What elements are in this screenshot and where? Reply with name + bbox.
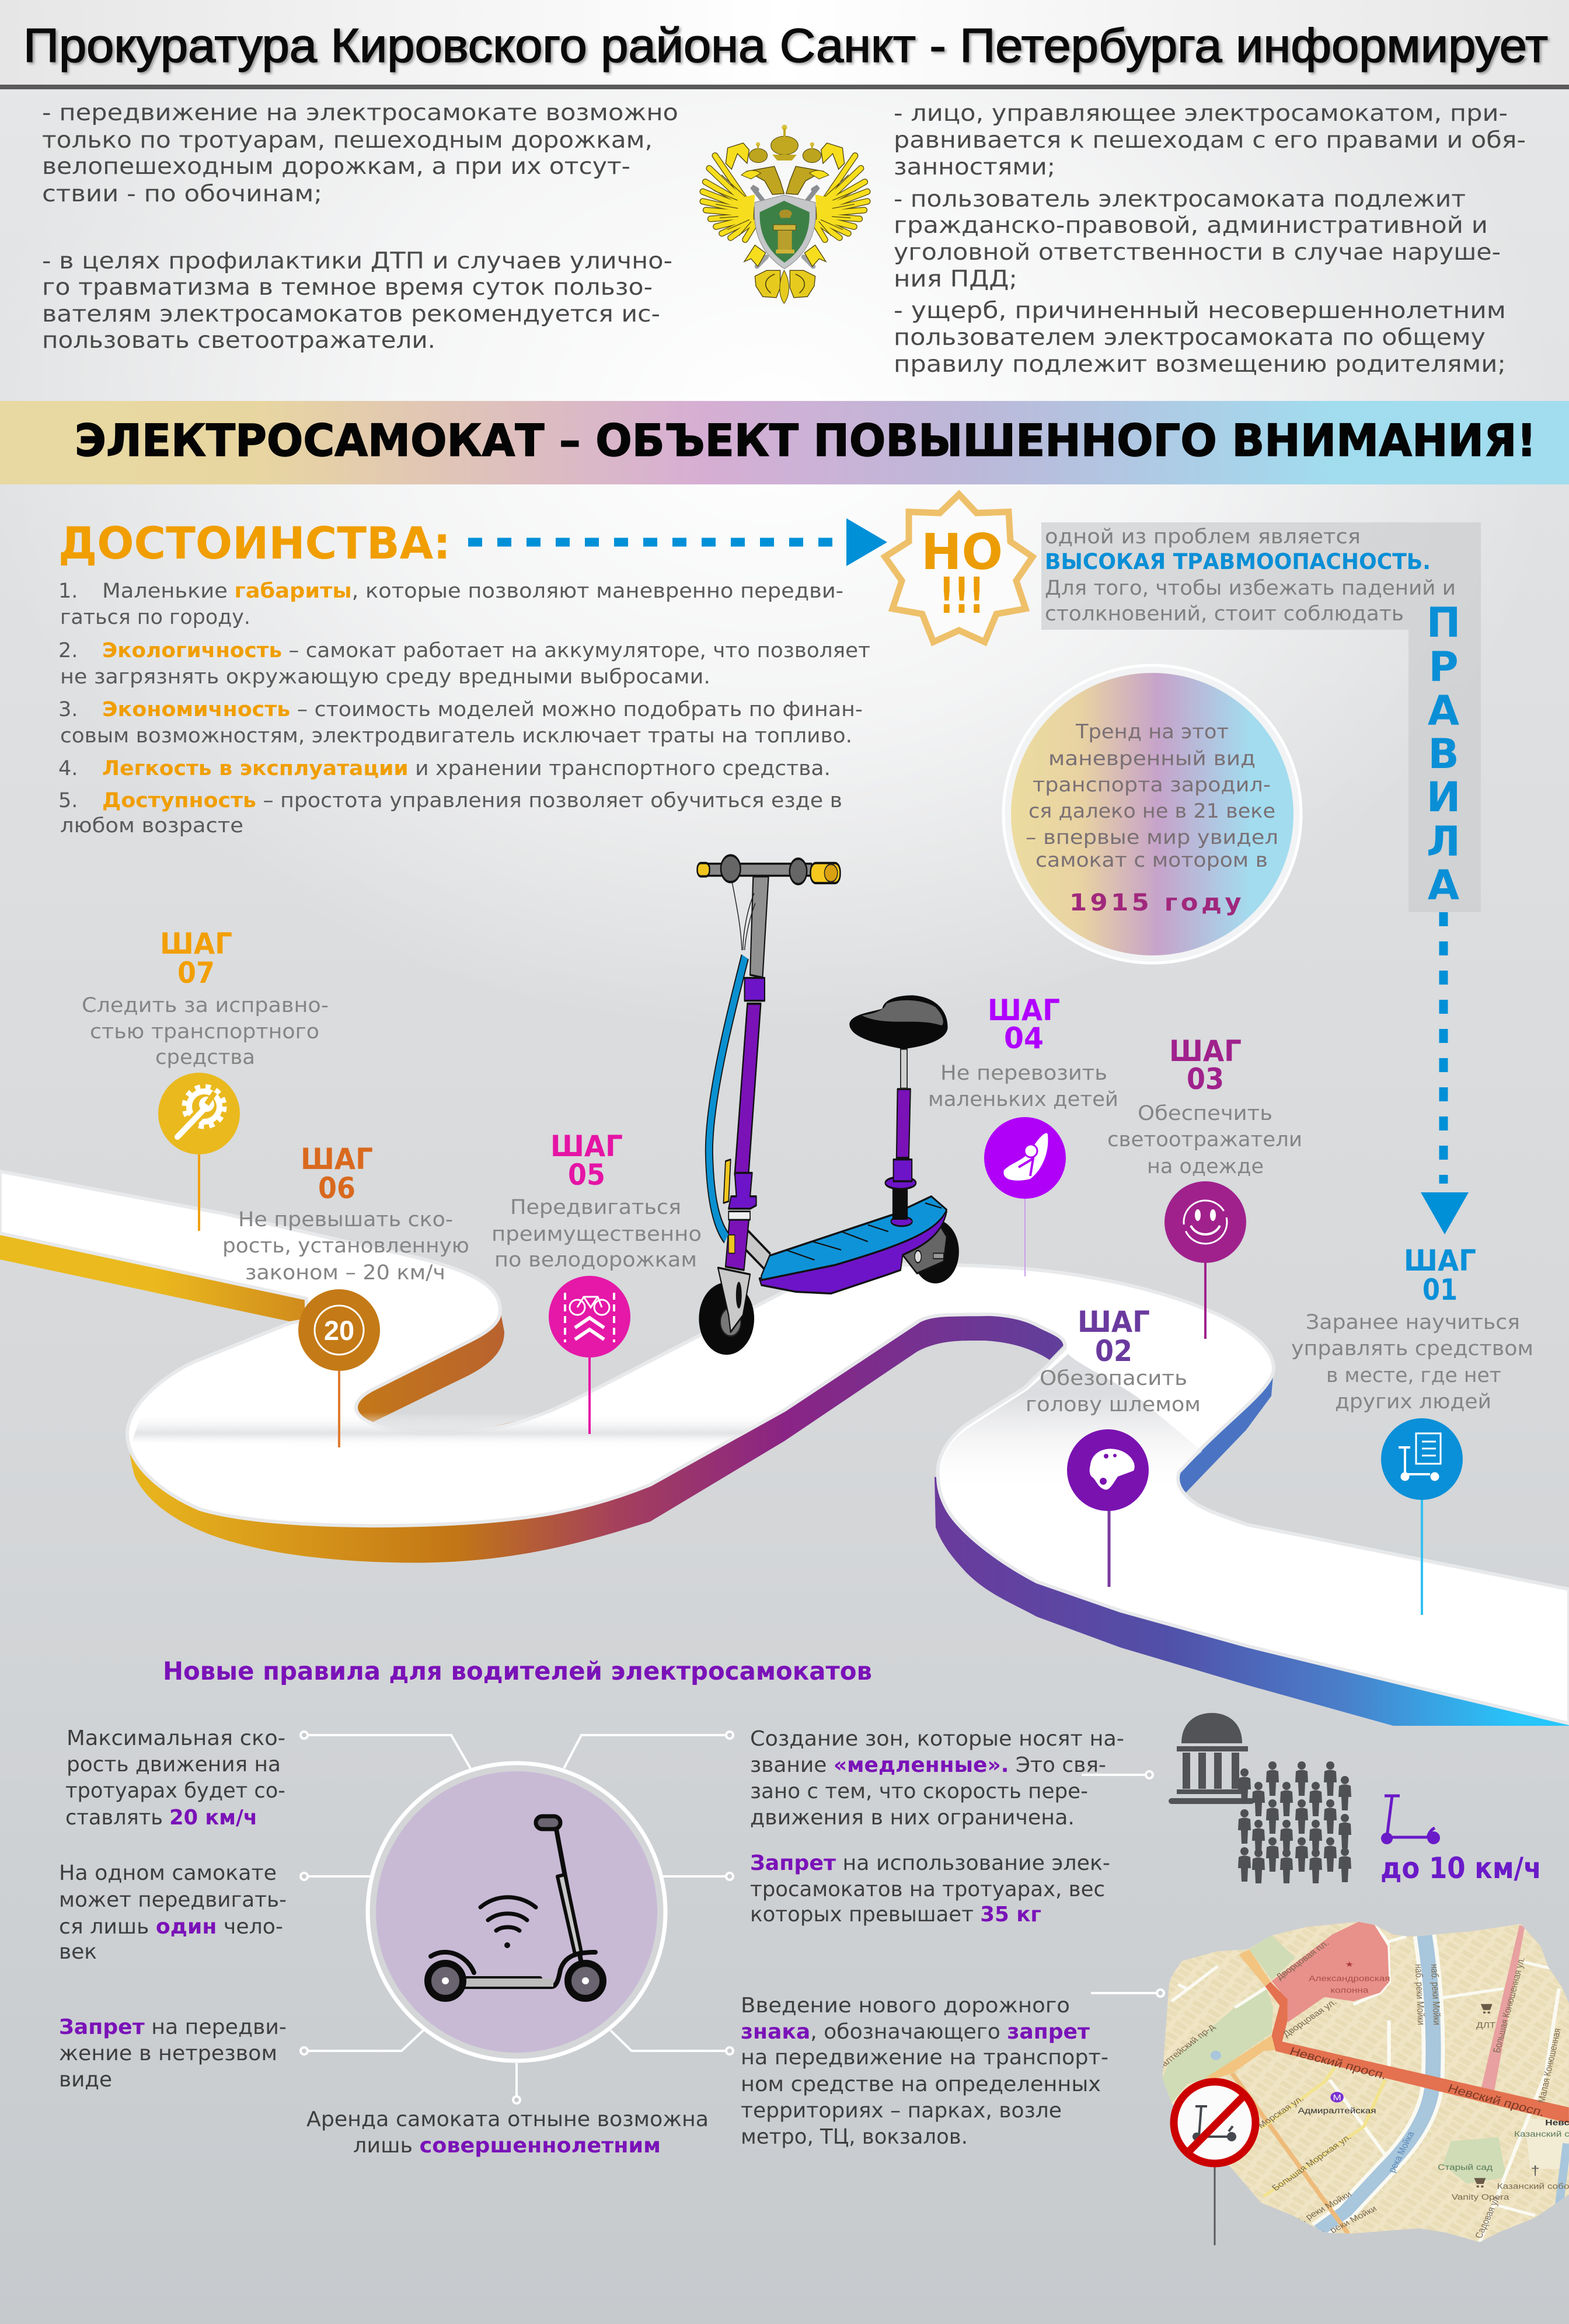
banner heading: ЭЛЕКТРОСАМОКАТ – ОБЪЕКТ ПОВЫШЕННОГО ВНИМАНИЯ! xyxy=(75,414,1536,466)
step 07 heading: ШАГ xyxy=(160,927,232,961)
list: advantages: Экономичность – стоимость моделей можно подобрать по финан- xyxy=(102,698,863,721)
icon: scooter checklist xyxy=(1381,1418,1463,1500)
callout: history circle: – впервые мир увидел xyxy=(1026,826,1278,849)
text: adults only: лишь совершеннолетним xyxy=(353,2134,661,2158)
text block: top right: пользователем электросамоката по общему xyxy=(894,324,1486,351)
map: Дворцовая ул. xyxy=(1281,1998,1339,2039)
vertical heading: rules: В xyxy=(1428,730,1459,778)
text: max speed: тротуарах будет со- xyxy=(65,1779,285,1803)
step 07 text: Следить за исправно- xyxy=(82,994,329,1017)
text block: top right: ния ПДД; xyxy=(894,266,1017,292)
text block: top left: только по тротуарам, пешеходным дорожкам, xyxy=(42,127,653,153)
text block: top left: ствии - по обочинам; xyxy=(42,181,322,207)
map: Невский просп. xyxy=(1288,2044,1389,2082)
text block: top left xyxy=(42,100,678,354)
step 02 text: голову шлемом xyxy=(1026,1393,1201,1416)
callout: history circle: Тренд на этот xyxy=(1075,720,1229,744)
panel: problem note: одной из проблем является xyxy=(1045,525,1361,549)
map: Малая Конюшенная xyxy=(1536,2028,1563,2103)
step 04 text: Не перевозить xyxy=(940,1062,1107,1085)
text block: top left: - в целях профилактики ДТП и случаев улично- xyxy=(42,248,672,274)
panel: problem note xyxy=(1041,522,1481,912)
step 05 text: Передвигаться xyxy=(510,1196,681,1219)
icon: speed limit 20 xyxy=(298,1289,380,1371)
step 01 heading: 01 xyxy=(1422,1273,1458,1307)
step 02 xyxy=(1026,1305,1201,1587)
text: new sign: метро, ТЦ, вокзалов. xyxy=(741,2125,968,2149)
map: Старый сад xyxy=(1438,2163,1493,2172)
illustration: electric scooter xyxy=(698,855,959,1355)
badge: but xyxy=(885,494,1033,642)
step 04 text: маленьких детей xyxy=(928,1088,1118,1111)
connector lines xyxy=(301,1732,1164,2103)
label: up to 10 km/h: до 10 км/ч xyxy=(1380,1851,1542,1885)
badge: but: НО xyxy=(921,524,1003,581)
callout: history circle: самокат с мотором в xyxy=(1035,849,1268,872)
step 07 text: стью транспортного xyxy=(90,1020,319,1044)
text: adults only xyxy=(306,2107,709,2158)
vertical heading: rules: А xyxy=(1428,687,1459,735)
list: advantages xyxy=(58,580,870,838)
map: М xyxy=(1333,2093,1341,2102)
arrow: dashed to step 1 xyxy=(1421,912,1469,1234)
icon: helmet xyxy=(1067,1429,1149,1511)
panel: problem note: Для того, чтобы избежать падений и xyxy=(1045,577,1456,600)
list: advantages: 2. xyxy=(58,639,78,662)
text: one rider: ся лишь один чело- xyxy=(59,1915,283,1939)
map: колонна xyxy=(1330,1986,1369,1995)
list: advantages: Маленькие габариты , которые позволяют маневренно передви- xyxy=(102,580,843,603)
step 02 heading: ШАГ xyxy=(1078,1305,1150,1339)
map: наб. реки Мойки xyxy=(1428,1964,1442,2025)
heading: new rules: Новые правила для водителей электросамокатов xyxy=(163,1657,872,1686)
map: † xyxy=(1531,2164,1540,2178)
map: Невский просп. xyxy=(1446,2082,1547,2119)
vertical heading: rules: П xyxy=(1427,599,1460,647)
text: new sign xyxy=(741,1994,1108,2149)
step 02 text: Обезопасить xyxy=(1040,1367,1187,1390)
step 05 heading: ШАГ xyxy=(550,1129,623,1163)
map: Морская ул. xyxy=(1256,2094,1306,2130)
vertical heading: rules: Л xyxy=(1427,818,1460,866)
text: max speed xyxy=(65,1726,285,1830)
step 05 text: преимущественно xyxy=(491,1223,702,1246)
text block: top left: - передвижение на электросамокате возможно xyxy=(42,100,678,126)
text: adults only: Аренда самоката отныне возможна xyxy=(306,2107,709,2131)
text: weight ban xyxy=(750,1851,1110,1927)
icon: crowd xyxy=(1238,1761,1351,1883)
text: new sign: знака, обозначающего запрет xyxy=(741,2020,1090,2044)
step 03 heading: ШАГ xyxy=(1169,1034,1242,1068)
text block: top right: уголовной ответственности в случае наруше- xyxy=(894,239,1501,266)
text: max speed: рость движения на xyxy=(67,1753,281,1777)
vertical heading: rules xyxy=(1427,599,1460,909)
text: new sign: на передвижение на транспорт- xyxy=(741,2046,1108,2070)
title bar xyxy=(0,0,1569,89)
panel: problem note: столкновений, стоит соблюдать xyxy=(1045,602,1404,626)
text: one rider: век xyxy=(59,1940,97,1964)
step 07 text: средства xyxy=(155,1046,255,1069)
icon: no scooters sign xyxy=(1174,2082,1256,2245)
text block: top left: го травматизма в темное время суток пользо- xyxy=(42,274,653,301)
vertical heading: rules: А xyxy=(1428,861,1459,909)
map: Большая Конюшенная ул. xyxy=(1491,1956,1528,2054)
icon: wrench and gear xyxy=(158,1073,240,1154)
text block: top left: вателям электросамокатов рекомендуется ис- xyxy=(42,301,660,327)
step 06 text: Не превышать ско- xyxy=(238,1208,453,1231)
step 07 xyxy=(82,927,329,1231)
text block: top right: правилу подлежит возмещению родителями; xyxy=(894,351,1506,378)
step 04 xyxy=(928,993,1118,1276)
list: advantages: 1. xyxy=(58,580,78,603)
step 01 text: Заранее научиться xyxy=(1306,1311,1520,1334)
list: advantages: не загрязнять окружающую среду вредными выбросами. xyxy=(60,665,710,689)
step 05 xyxy=(491,1129,702,1434)
text block: top right: занностями; xyxy=(894,154,1055,180)
text: no drunk riding: Запрет на передви- xyxy=(59,2015,287,2039)
text: max speed: ставлять 20 км/ч xyxy=(65,1806,257,1830)
step 06 heading: ШАГ xyxy=(301,1142,373,1176)
step 01 xyxy=(1291,1244,1533,1615)
heading: advantages: ДОСТОИНСТВА: xyxy=(58,517,451,569)
text: slow zones xyxy=(750,1727,1124,1830)
map: Vanity Opera xyxy=(1452,2193,1509,2201)
step 06 heading: 06 xyxy=(318,1171,355,1205)
text block: top right: - ущерб, причиненный несовершеннолетним xyxy=(894,298,1506,324)
icon: purple scooter xyxy=(1381,1796,1440,1844)
road: winding path xyxy=(0,1171,1569,1726)
map: Большая Морская ул. xyxy=(1270,2133,1354,2193)
map: Дворцовая пл. xyxy=(1274,1939,1331,1981)
step 04 heading: 04 xyxy=(1004,1021,1044,1055)
step 07 heading xyxy=(160,927,232,990)
callout: history circle: транспорта зародил- xyxy=(1033,773,1271,797)
vertical heading: rules: И xyxy=(1427,773,1460,821)
list: advantages: гаться по городу. xyxy=(60,606,250,629)
list: advantages: любом возрасте xyxy=(60,814,243,838)
icon: bike lane xyxy=(549,1276,630,1358)
step 03 text xyxy=(1107,1102,1302,1178)
step 07 text xyxy=(82,994,329,1069)
icon: smart scooter xyxy=(428,1816,603,1998)
text block: top right: равнивается к пешеходам с его правами и обя- xyxy=(894,127,1526,153)
banner xyxy=(0,401,1569,484)
text: slow zones: звание «медленные». Это свя- xyxy=(750,1753,1106,1777)
map: наб. реки Мойки xyxy=(1309,2204,1379,2245)
map xyxy=(1136,1914,1569,2248)
map: Садовая ул. xyxy=(1473,2194,1503,2239)
step 06 heading xyxy=(301,1142,373,1205)
map: Адмиралтейский пр-д xyxy=(1136,2023,1217,2085)
map: наб. реки Мойки xyxy=(1413,1964,1427,2025)
step 02 text xyxy=(1026,1367,1201,1416)
text block: top left: велопешеходным дорожкам, а при их отсут- xyxy=(42,153,630,180)
list: advantages: Экологичность – самокат работает на аккумуляторе, что позволяет xyxy=(102,639,870,662)
icon: prosecutor emblem xyxy=(703,125,867,303)
text: slow zones: Создание зон, которые носят на- xyxy=(750,1727,1124,1751)
text: max speed: Максимальная ско- xyxy=(67,1726,285,1750)
list: advantages: Доступность – простота управления позволяет обучиться езде в xyxy=(102,789,842,812)
circle: scooter illustration xyxy=(368,1763,665,2061)
text block: top left: пользовать светоотражатели. xyxy=(42,327,435,354)
step 01 text xyxy=(1291,1311,1533,1414)
step 02 heading xyxy=(1078,1305,1150,1368)
map: ДЛТ xyxy=(1476,2021,1496,2030)
text: new sign: Введение нового дорожного xyxy=(741,1994,1070,2018)
step 04 text xyxy=(928,1062,1118,1111)
map: река Мойка xyxy=(1386,2130,1417,2174)
step 03 heading: 03 xyxy=(1187,1062,1224,1096)
text: no drunk riding: виде xyxy=(59,2068,112,2092)
step 05 heading xyxy=(550,1129,623,1192)
step 02 heading: 02 xyxy=(1095,1334,1132,1368)
map: Адмиралтейская xyxy=(1298,2106,1376,2116)
list: advantages: 4. xyxy=(58,757,78,780)
text block: top right xyxy=(894,100,1526,378)
callout: history circle xyxy=(1003,665,1301,963)
text: one rider: может передвигать- xyxy=(59,1888,287,1912)
step 06 text: рость, установленную xyxy=(222,1234,469,1258)
icon: public building xyxy=(1169,1713,1254,1804)
step 05 text: по велодорожкам xyxy=(494,1248,697,1272)
step 05 heading: 05 xyxy=(568,1158,605,1192)
callout: history circle: ся далеко не в 21 веке xyxy=(1028,800,1275,823)
map: наб. реки Мойки xyxy=(1285,2190,1354,2232)
step 03 text: светоотражатели xyxy=(1107,1128,1302,1151)
step 06 xyxy=(222,1142,469,1447)
callout: history circle: 1915 году xyxy=(1069,889,1244,916)
text: new sign: ном средстве на определенных xyxy=(741,2072,1101,2096)
title: Прокуратура Кировского района Санкт - Петербурга информирует xyxy=(23,19,1548,72)
text: slow zones: зано с тем, что скорость пере- xyxy=(750,1779,1088,1803)
list: advantages: Легкость в эксплуатации и хранении транспортного средства. xyxy=(102,757,831,780)
badge: but: !!! xyxy=(939,567,984,625)
step 07 heading: 07 xyxy=(177,956,215,990)
text block: top right: - лицо, управляющее электросамокатом, при- xyxy=(894,100,1508,127)
step 06 text: законом – 20 км/ч xyxy=(245,1261,445,1285)
text block: top right: гражданско-правовой, административной и xyxy=(894,212,1488,239)
step 01 text: управлять средством xyxy=(1291,1337,1533,1360)
step 03 xyxy=(1107,1034,1302,1339)
list: advantages: 5. xyxy=(58,789,78,812)
text: slow zones: движения в них ограничена. xyxy=(750,1806,1075,1830)
list: advantages: 3. xyxy=(58,698,78,721)
panel: problem note: ВЫСОКАЯ ТРАВМООПАСНОСТЬ. xyxy=(1045,549,1431,574)
text block: top right: - пользователь электросамоката подлежит xyxy=(894,186,1466,212)
step 06 text xyxy=(222,1208,469,1285)
step 01 heading: ШАГ xyxy=(1404,1244,1476,1278)
map: ★ xyxy=(1345,1961,1354,1969)
step 01 heading xyxy=(1404,1244,1476,1307)
text: one rider xyxy=(59,1861,287,1964)
step 04 heading: ШАГ xyxy=(988,993,1060,1027)
icon: smile xyxy=(1164,1181,1246,1263)
step 03 heading xyxy=(1169,1034,1242,1096)
vertical heading: rules: Р xyxy=(1428,643,1459,691)
step 04 heading xyxy=(988,993,1060,1055)
icon: speed limit 20: 20 xyxy=(324,1315,354,1346)
text: weight ban: Запрет на использование элек- xyxy=(750,1851,1110,1875)
text: no drunk riding: жение в нетрезвом xyxy=(59,2042,277,2065)
map: Александровская xyxy=(1309,1974,1390,1983)
text: no drunk riding xyxy=(59,2015,287,2092)
text: weight ban: которых превышает 35 кг xyxy=(750,1903,1041,1927)
icon: child seat xyxy=(984,1117,1066,1199)
step 03 text: Обеспечить xyxy=(1138,1102,1272,1125)
text: one rider: На одном самокате xyxy=(59,1861,277,1885)
list: advantages: совым возможностям, электродвигатель исключает траты на топливо. xyxy=(60,724,852,748)
step 01 text: других людей xyxy=(1335,1390,1491,1414)
step 05 text xyxy=(491,1196,702,1272)
callout: history circle: маневренный вид xyxy=(1048,747,1256,770)
text: new sign: территориях – парках, возле xyxy=(741,2099,1062,2123)
text: weight ban: тросамокатов на тротуарах, вес xyxy=(750,1878,1105,1901)
step 03 text: на одежде xyxy=(1147,1155,1264,1178)
step 01 text: в месте, где нет xyxy=(1326,1364,1501,1387)
arrow: dashed to badge xyxy=(468,518,887,566)
